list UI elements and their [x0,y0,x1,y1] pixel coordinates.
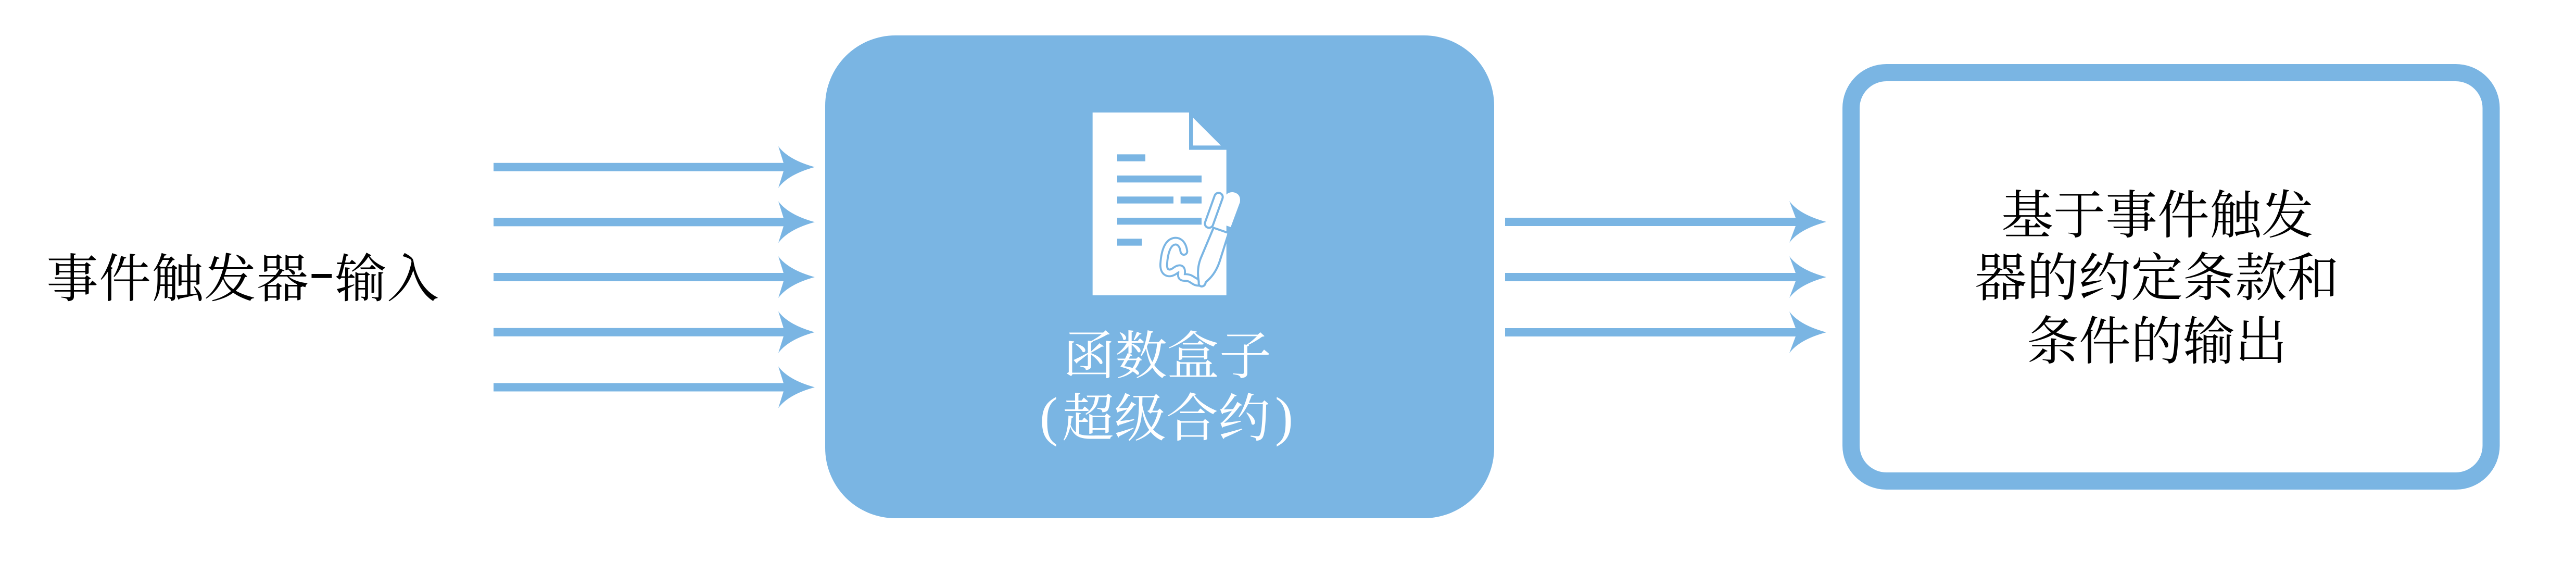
function box subtitle: 超级合约 [1062,377,1270,452]
output arrow 1 [1505,201,1826,243]
input arrow 5 [494,367,815,408]
input label: - [308,207,335,319]
output arrow 2 [1505,256,1826,298]
input label: 输入 [335,237,439,312]
input arrow 3 [494,256,815,298]
function box subtitle: ) [1275,386,1293,447]
input arrow 4 [494,311,815,353]
panel: function box (smart contract) [825,35,1494,518]
function box subtitle: ( [1040,386,1058,447]
output text [1975,173,2339,374]
output arrows [1505,201,1826,353]
function box title: 函数盒子 [1063,314,1271,389]
output text: 器的约定条款和 [1975,236,2339,311]
output arrow 3 [1505,311,1826,353]
input arrow 2 [494,201,815,243]
icon: signed contract document [1093,113,1240,295]
input label: 事件触发器 [46,237,309,312]
panel: output box [1851,73,2491,481]
output text: 基于事件触发 [2001,173,2314,248]
input arrows [494,146,815,408]
output text: 条件的输出 [2027,299,2287,374]
input arrow 1 [494,146,815,188]
